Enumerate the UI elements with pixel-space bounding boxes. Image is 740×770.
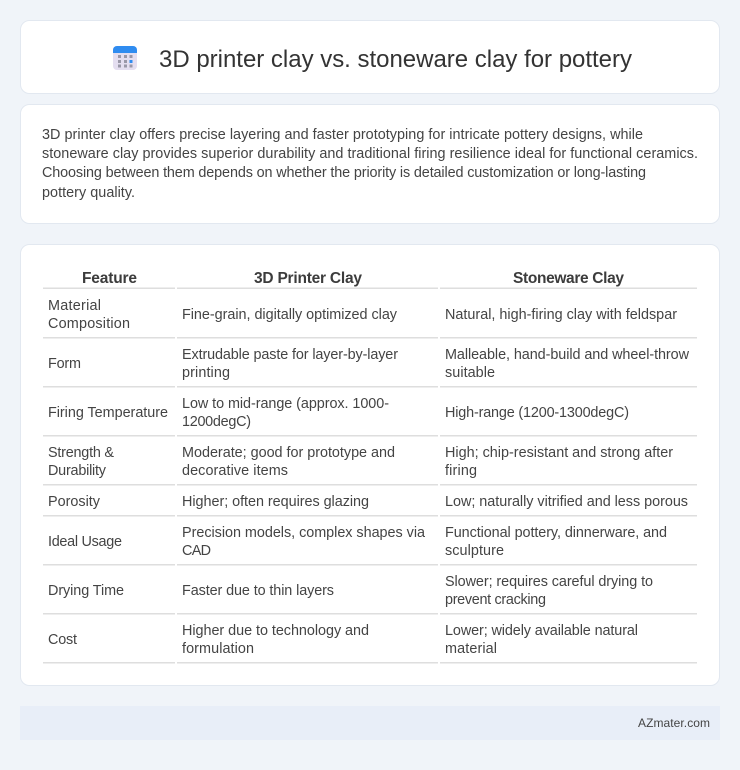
- row: material composition: Fine-grain, digitally optimized clay: [182, 307, 398, 323]
- row: form: suitable: [445, 365, 495, 381]
- row: firing temperature: [43, 396, 697, 436]
- row: cost: Higher due to technology and: [182, 623, 369, 639]
- row: drying time: prevent cracking: [445, 592, 546, 608]
- row: material composition: Natural, high-firing clay with feldspar: [445, 307, 677, 323]
- table header: Feature: [82, 270, 137, 287]
- row: form: Form: [48, 356, 81, 372]
- text block: introduction paragraph: stoneware clay provides superior durability and traditional firing resilience ideal for functional ceramics.: [42, 146, 698, 162]
- row: strength and durability: Durability: [48, 463, 107, 479]
- row: porosity: Higher; often requires glazing: [182, 494, 369, 510]
- row: material composition: [43, 298, 697, 338]
- text block: introduction paragraph: 3D printer clay offers precise layering and faster prototyping for intricate pottery designs, while: [42, 127, 643, 143]
- icon: calendar: [113, 46, 137, 70]
- row: ideal usage: Precision models, complex shapes via: [182, 525, 425, 541]
- footer: [20, 706, 720, 740]
- row: drying time: Drying Time: [48, 583, 124, 599]
- title: 3D printer clay vs. stoneware clay for pottery: [159, 46, 632, 73]
- row: firing temperature: 1200degC): [182, 414, 251, 430]
- row: drying time: [43, 574, 697, 614]
- row: form: Extrudable paste for layer-by-layer: [182, 347, 398, 363]
- footer: AZmater.com: [638, 716, 710, 730]
- row: strength and durability: firing: [445, 463, 477, 479]
- row: strength and durability: Strength &: [48, 445, 114, 461]
- row: firing temperature: Low to mid-range (approx. 1000-: [182, 396, 389, 412]
- row: form: [43, 347, 697, 388]
- row: cost: [43, 623, 697, 664]
- table header: [43, 270, 697, 289]
- row: ideal usage: Ideal Usage: [48, 534, 122, 550]
- row: firing temperature: Firing Temperature: [48, 405, 168, 421]
- row: material composition: Material: [48, 298, 101, 314]
- text block: introduction paragraph: [42, 127, 698, 201]
- row: porosity: Porosity: [48, 494, 101, 510]
- row: ideal usage: Functional pottery, dinnerware, and: [445, 525, 667, 541]
- row: drying time: Slower; requires careful drying to: [445, 574, 653, 590]
- row: cost: formulation: [182, 641, 254, 657]
- row: drying time: Faster due to thin layers: [182, 583, 334, 599]
- table header: Stoneware Clay: [513, 270, 624, 287]
- row: strength and durability: Moderate; good for prototype and: [182, 445, 395, 461]
- row: ideal usage: [43, 525, 697, 566]
- text block: introduction paragraph: pottery quality.: [42, 185, 135, 201]
- panel: introduction: [20, 104, 720, 224]
- row: firing temperature: High-range (1200-1300degC): [445, 405, 629, 421]
- row: ideal usage: CAD: [182, 543, 211, 559]
- row: material composition: Composition: [48, 316, 130, 332]
- row: porosity: [43, 494, 697, 516]
- row: porosity: Low; naturally vitrified and less porous: [445, 494, 688, 510]
- panel: title card: [20, 20, 720, 94]
- row: cost: Lower; widely available natural: [445, 623, 638, 639]
- row: strength and durability: [43, 445, 697, 486]
- row: cost: material: [445, 641, 497, 657]
- table header: 3D Printer Clay: [254, 270, 362, 287]
- row: form: printing: [182, 365, 230, 381]
- row: strength and durability: High; chip-resistant and strong after: [445, 445, 673, 461]
- panel: comparison table: [20, 244, 720, 686]
- row: strength and durability: decorative items: [182, 463, 288, 479]
- row: cost: Cost: [48, 632, 77, 648]
- row: form: Malleable, hand-build and wheel-throw: [445, 347, 690, 363]
- text block: introduction paragraph: Choosing between them depends on whether the priority is detailed customization or long-lasting: [42, 165, 646, 181]
- row: ideal usage: sculpture: [445, 543, 504, 559]
